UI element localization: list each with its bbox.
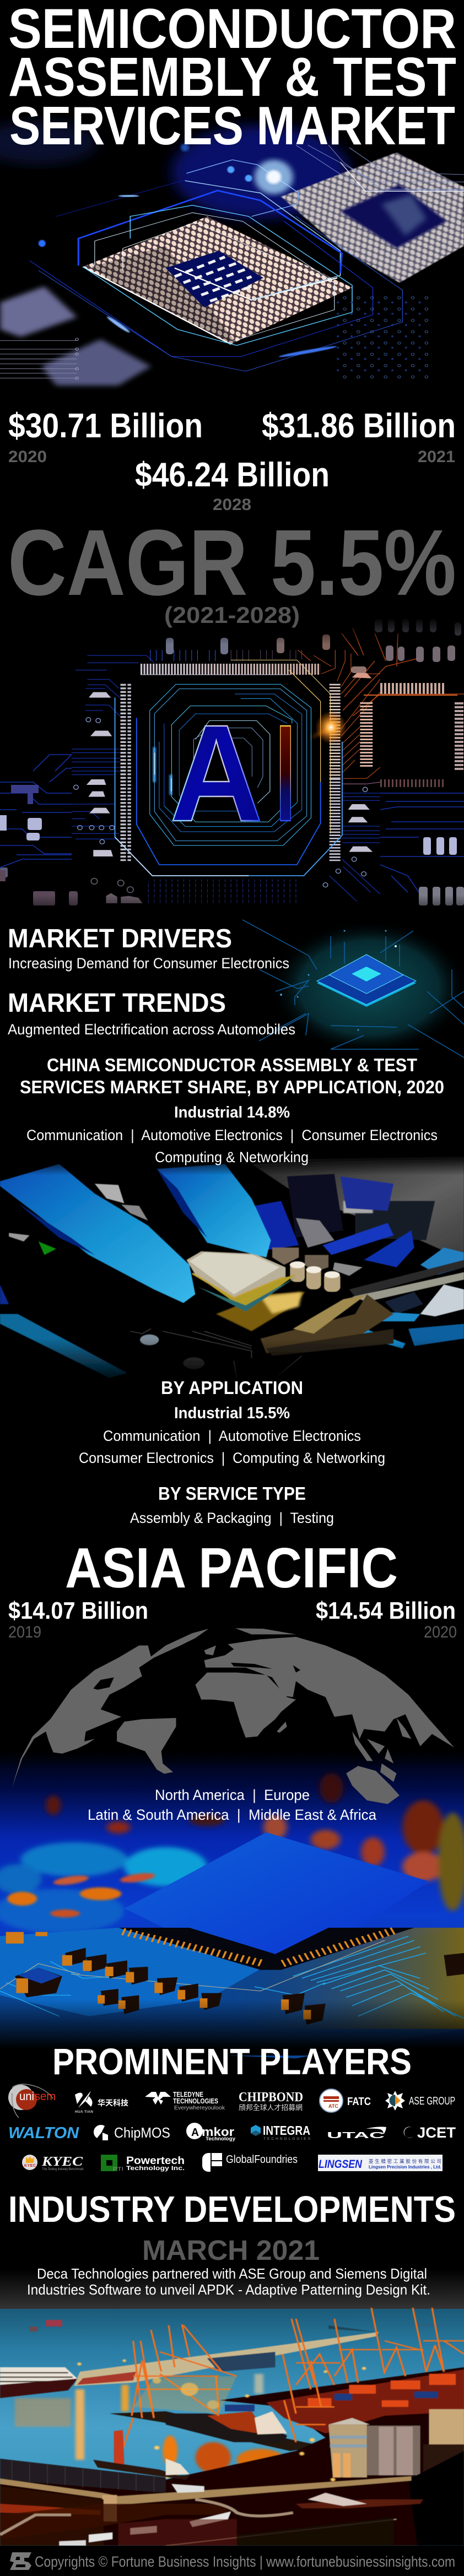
by service type: Assembly & Packaging | Testing <box>130 1510 334 1526</box>
by application: Consumer Electronics | Computing & Networking <box>79 1450 385 1466</box>
image: chip hero <box>0 121 464 386</box>
china share values: Computing & Networking <box>155 1149 309 1165</box>
AI letters: I <box>276 696 295 850</box>
by application: BY APPLICATION <box>161 1378 303 1398</box>
by service type: BY SERVICE TYPE <box>158 1483 306 1504</box>
logo: Teledyne: Everywhereyoulook <box>174 2105 225 2111</box>
icon: Fortune Business Insights logo <box>10 2552 31 2570</box>
title <box>8 0 456 156</box>
market drivers: MARKET DRIVERS <box>8 924 232 953</box>
image: AI circuit board <box>0 617 464 923</box>
world map <box>12 1628 454 1804</box>
logo: Unisem: uni <box>19 2090 34 2103</box>
stat: Asia Pacific 2019: 2019 <box>8 1623 41 1641</box>
development description: Industries Software to unveil APDK - Adaptive Patterning Design Kit. <box>27 2281 430 2298</box>
logo: JCET: JCET <box>417 2124 456 2141</box>
logo: GlobalFoundries <box>202 2153 298 2172</box>
logo: Chipbond <box>239 2090 303 2112</box>
logo: Amkor: mkor <box>202 2125 234 2139</box>
logo: Chipbond: 頎邦全球人才招募網 <box>239 2102 303 2112</box>
logo: ASE Group <box>385 2091 455 2111</box>
by application: Communication | Automotive Electronics <box>103 1428 361 1444</box>
logo: Powertech: Powertech <box>126 2155 185 2167</box>
stat: 2020 market size: 2020 <box>8 448 47 466</box>
development description: Deca Technologies partnered with ASE Group and Siemens Digital <box>37 2265 427 2282</box>
logo: Chipbond: CHIPBOND <box>239 2090 303 2105</box>
stat: Asia Pacific 2020 <box>316 1597 457 1641</box>
logo: Teledyne <box>145 2090 225 2111</box>
logo: Hua Tian <box>75 2091 128 2114</box>
logo: ChipMOS <box>94 2124 170 2141</box>
logo: FATC: ATC <box>328 2103 338 2109</box>
stat: 2020 market size: $30.71 Billion <box>8 407 203 445</box>
stat: 2021 market size <box>262 407 456 466</box>
development date: MARCH 2021 <box>142 2235 320 2266</box>
logo: Teledyne: TELEDYNE <box>173 2090 203 2098</box>
logo: ChipMOS: ChipMOS <box>114 2124 170 2141</box>
footer <box>0 2546 464 2576</box>
by service type <box>130 1483 334 1526</box>
logo: Amkor <box>186 2123 235 2141</box>
logo: FATC: FATC <box>347 2096 371 2108</box>
by application: Industrial 15.5% <box>174 1404 290 1422</box>
logo: Unisem <box>8 2084 56 2118</box>
heading: prominent players: PROMINENT PLAYERS <box>52 2041 412 2083</box>
stat: Asia Pacific 2020: 2020 <box>424 1623 457 1641</box>
heading: Asia Pacific: ASIA PACIFIC <box>65 1536 398 1599</box>
stat: 2028 market size <box>135 456 330 514</box>
china share values: Industrial 14.8% <box>174 1104 290 1121</box>
market trends <box>8 989 295 1038</box>
logo: GlobalFoundries: GlobalFoundries <box>226 2154 298 2166</box>
china share heading: CHINA SEMICONDUCTOR ASSEMBLY & TEST <box>47 1055 417 1075</box>
panel: company logos <box>8 2084 456 2172</box>
logo: Integra: INTEGRA <box>263 2123 310 2138</box>
logo: Integra: TECHNOLOGIES <box>263 2137 311 2141</box>
logo: Powertech: Technology Inc. <box>126 2165 185 2172</box>
logo: Amkor: A <box>191 2127 199 2139</box>
stat: Asia Pacific 2019: $14.07 Billion <box>8 1597 148 1624</box>
logo: Amkor: Technology <box>206 2136 235 2141</box>
logo: Unisem: sem <box>35 2090 56 2103</box>
market trends: Augmented Electrification across Automobiles <box>8 1021 295 1038</box>
market trends: MARKET TRENDS <box>8 989 226 1018</box>
logo: Teledyne: TECHNOLOGIES <box>173 2097 218 2105</box>
logo: KYEC: KYEC <box>41 2155 83 2169</box>
image: gloved hand placing chip <box>0 1156 464 1385</box>
china share values <box>26 1104 438 1165</box>
development description <box>27 2265 430 2298</box>
china share heading: SERVICES MARKET SHARE, BY APPLICATION, 2020 <box>20 1077 444 1097</box>
market drivers: Increasing Demand for Consumer Electronics <box>8 955 289 972</box>
logo: Lingsen: LINGSEN <box>319 2158 363 2171</box>
other regions: North America | Europe <box>155 1787 310 1803</box>
logo: Hua Tian: HUA TIAN <box>75 2110 93 2114</box>
other regions: Latin & South America | Middle East & Africa <box>88 1807 377 1823</box>
stat: 2028 market size: 2028 <box>213 496 251 514</box>
image: port at dusk <box>0 2269 464 2546</box>
icon: glowing chip <box>242 920 464 1057</box>
china share heading <box>20 1055 444 1097</box>
logo: Lingsen <box>318 2155 443 2171</box>
logo: Integra <box>251 2123 311 2141</box>
logo: FATC <box>320 2089 371 2112</box>
other regions <box>88 1787 377 1823</box>
logo: KYEC: KYEC <box>24 2164 36 2168</box>
CAGR period: (2021-2028) <box>164 602 300 628</box>
logo: Walton: WALTON <box>8 2124 79 2142</box>
logo: UTAC <box>327 2127 386 2140</box>
logo: Lingsen: 菱生精密工業股份有限公司 <box>369 2159 441 2164</box>
logo: KYEC: The Testing Industry Benchmark <box>42 2168 84 2171</box>
by application <box>79 1378 385 1466</box>
logo: Powertech: PTI <box>113 2166 123 2172</box>
market drivers <box>8 924 289 972</box>
china share values: Communication | Automotive Electronics | Consumer Electronics <box>26 1127 438 1143</box>
logo: Powertech <box>101 2155 185 2172</box>
image: blue circuit board with processor <box>0 1746 464 2058</box>
stat: 2021 market size: 2021 <box>418 448 455 466</box>
stat: 2020 market size <box>8 407 203 466</box>
logo: UTAC: UTAC <box>327 2131 385 2140</box>
stat: Asia Pacific 2019 <box>8 1597 148 1641</box>
logo: Hua Tian: 华天科技 <box>98 2098 128 2107</box>
logo: Lingsen: Lingsen Precision Industries , Ltd. <box>369 2165 441 2170</box>
logo: KYEC <box>22 2155 84 2171</box>
AI letters: A <box>170 696 263 850</box>
stat: 2028 market size: $46.24 Billion <box>135 456 330 494</box>
